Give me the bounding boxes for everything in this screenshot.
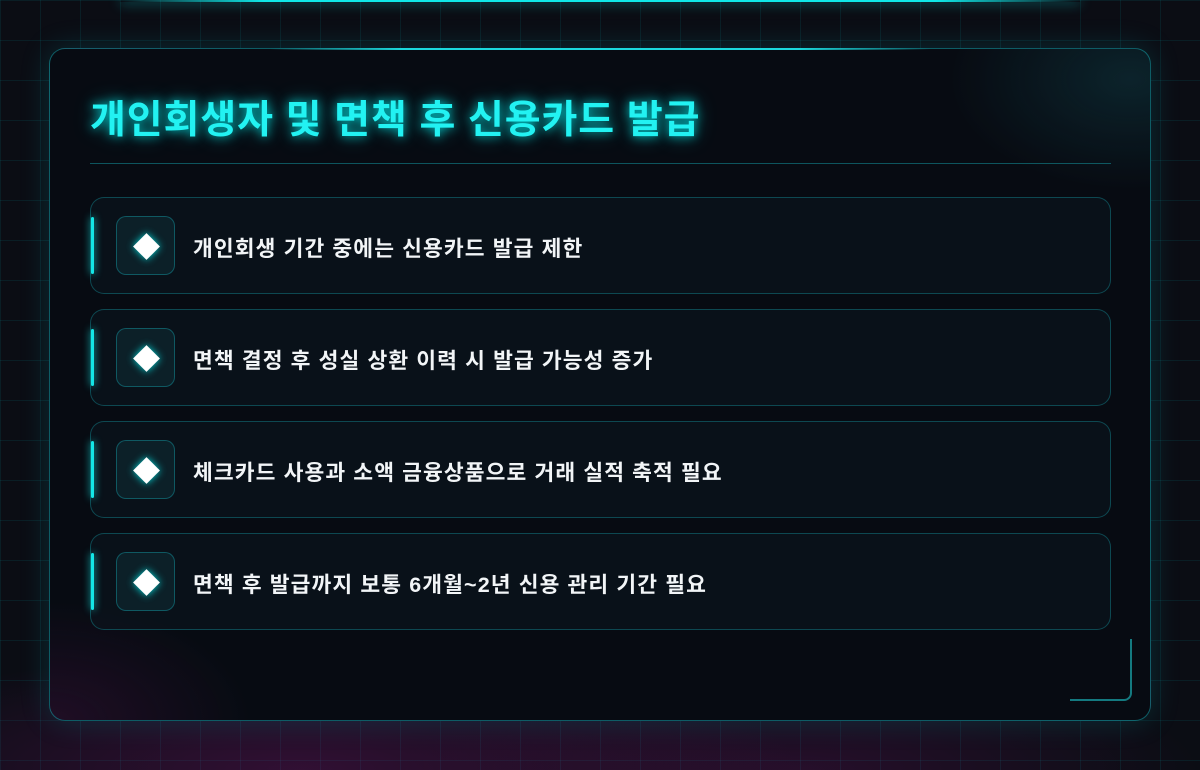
- text 2: 면책 결정 후 성실 상환 이력 시 발급 가능성 증가: [193, 349, 653, 373]
- icon: diamond: [116, 440, 175, 499]
- text 3: 체크카드 사용과 소액 금융상품으로 거래 실적 축적 필요: [193, 461, 723, 485]
- corner bracket: [1070, 639, 1132, 701]
- text 4: 면책 후 발급까지 보통 6개월~2년 신용 관리 기간 필요: [193, 573, 707, 597]
- item 2: [90, 309, 1111, 406]
- icon: diamond: [116, 328, 175, 387]
- item 3: [90, 421, 1111, 518]
- title: 개인회생자 및 면책 후 신용카드 발급: [90, 99, 700, 142]
- item 4: [90, 533, 1111, 630]
- icon: diamond: [116, 552, 175, 611]
- item 1: [90, 197, 1111, 294]
- text 1: 개인회생 기간 중에는 신용카드 발급 제한: [193, 237, 583, 261]
- icon: diamond: [116, 216, 175, 275]
